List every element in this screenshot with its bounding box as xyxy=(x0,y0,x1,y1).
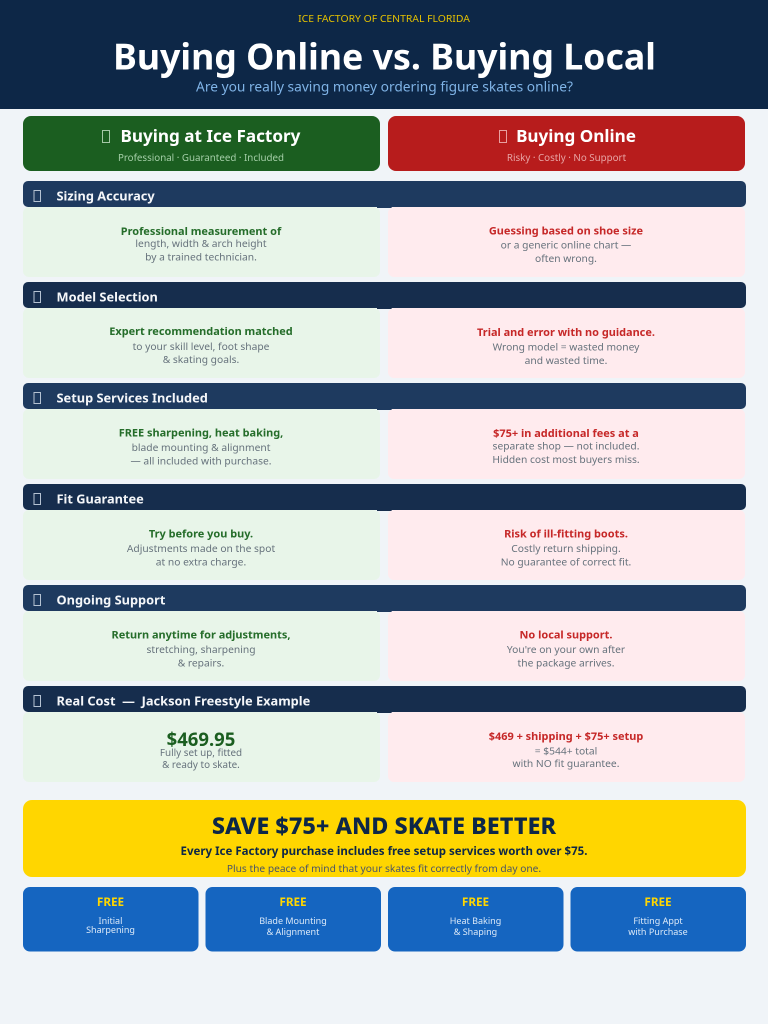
online card: $75+ in additional fees at a xyxy=(493,426,639,441)
online card: = $544+ total xyxy=(535,744,597,758)
panel: free fitting appointment: Fitting Appt xyxy=(633,914,683,927)
online card: with NO fit guarantee. xyxy=(513,757,620,771)
panel: Real Cost row xyxy=(23,686,746,782)
online card: Risk of ill-fitting boots. xyxy=(504,526,628,542)
online card xyxy=(388,712,745,782)
ice factory card: to your skill level, foot shape xyxy=(133,340,270,354)
online card xyxy=(388,308,745,378)
panel: free heat baking: Heat Baking xyxy=(450,914,501,927)
panel: free heat baking: FREE xyxy=(462,894,489,910)
ice factory card xyxy=(23,207,380,277)
ice factory card: Fully set up, fitted xyxy=(160,745,242,759)
online card: No guarantee of correct fit. xyxy=(501,556,632,570)
ice factory card: FREE sharpening, heat baking, xyxy=(119,426,283,440)
panel: Fit Guarantee row xyxy=(23,484,746,580)
ice factory card: blade mounting & alignment xyxy=(132,441,271,455)
title: Buying Online vs. Buying Local xyxy=(113,32,656,80)
ice factory card: $469.95 xyxy=(167,727,235,752)
panel: free fitting appointment: with Purchase xyxy=(628,925,688,938)
brand label: ICE FACTORY OF CENTRAL FLORIDA xyxy=(298,12,470,26)
panel: free blade mounting: & Alignment xyxy=(267,925,320,938)
ice factory card: at no extra charge. xyxy=(156,556,246,570)
ice factory card: Professional measurement of xyxy=(121,224,282,239)
ice factory card: Expert recommendation matched xyxy=(109,324,293,339)
ice factory card: & skating goals. xyxy=(163,353,240,367)
section header: Setup Services Included xyxy=(56,389,208,407)
section header: Model Selection xyxy=(56,288,158,306)
ice factory card: Return anytime for adjustments, xyxy=(112,628,290,642)
tagline: Risky · Costly · No Support xyxy=(507,151,627,164)
ice factory card: & ready to skate. xyxy=(162,757,240,771)
online card: $469 + shipping + $75+ setup xyxy=(489,729,643,744)
ice factory card: length, width & arch height xyxy=(135,237,267,251)
panel: free sharpening: Sharpening xyxy=(86,923,135,936)
online card: separate shop — not included. xyxy=(493,440,640,454)
ice factory card: Try before you buy. xyxy=(149,526,253,542)
panel: free sharpening: FREE xyxy=(97,894,124,910)
online card: Trial and error with no guidance. xyxy=(477,325,655,340)
panel: free heat baking: & Shaping xyxy=(454,925,497,938)
panel: Setup Services Included row xyxy=(23,383,746,479)
panel: free heat baking xyxy=(388,887,564,952)
panel: free blade mounting xyxy=(206,887,381,952)
icon: placeholder box xyxy=(500,130,506,142)
callout text: Every Ice Factory purchase includes free setup services worth over $75. xyxy=(181,844,587,859)
online card: You're on your own after xyxy=(507,643,626,657)
panel: free blade mounting: FREE xyxy=(279,894,307,910)
section header xyxy=(23,585,746,612)
panel: free sharpening xyxy=(23,887,198,952)
panel: free blade mounting: Blade Mounting xyxy=(259,914,327,927)
subtitle: Are you really saving money ordering figure skates online? xyxy=(196,78,573,96)
online card: No local support. xyxy=(520,628,612,642)
tagline: Professional · Guaranteed · Included xyxy=(118,151,284,164)
section header: Fit Guarantee xyxy=(56,490,144,508)
online card: Costly return shipping. xyxy=(511,542,621,556)
online card: or a generic online chart — xyxy=(501,238,631,252)
section header: Real Cost — Jackson Freestyle Example xyxy=(56,692,311,710)
ice factory card: by a trained technician. xyxy=(145,250,257,264)
section header xyxy=(23,383,746,410)
ice factory card: & repairs. xyxy=(178,656,225,670)
panel: Sizing Accuracy row xyxy=(23,181,746,277)
panel: Model Selection row xyxy=(23,282,746,378)
section header: Sizing Accuracy xyxy=(56,187,155,205)
section header xyxy=(23,686,746,713)
heading: Buying Online xyxy=(516,125,636,148)
header banner xyxy=(0,0,768,109)
ice factory card xyxy=(23,510,380,580)
section header: Ongoing Support xyxy=(56,591,166,609)
panel: free sharpening: Initial xyxy=(99,914,122,927)
ice factory card: — all included with purchase. xyxy=(130,454,272,468)
online card: Guessing based on shoe size xyxy=(489,224,644,238)
panel: Buying at Ice Factory column header xyxy=(23,116,380,171)
callout: save banner xyxy=(23,800,746,877)
online card xyxy=(388,409,745,479)
panel: free fitting appointment: FREE xyxy=(644,894,672,910)
ice factory card xyxy=(23,308,380,378)
online card xyxy=(388,510,745,580)
section header xyxy=(23,282,746,309)
section header xyxy=(23,181,746,208)
online card xyxy=(388,611,745,681)
panel: Buying Online column header xyxy=(388,116,745,171)
online card: and wasted time. xyxy=(525,354,608,368)
heading: Buying at Ice Factory xyxy=(121,125,301,148)
online card: Wrong model = wasted money xyxy=(493,340,640,354)
ice factory card xyxy=(23,712,380,782)
section header xyxy=(23,484,746,511)
ice factory card xyxy=(23,409,380,479)
ice factory card xyxy=(23,611,380,681)
online card xyxy=(388,207,745,277)
online card: Hidden cost most buyers miss. xyxy=(492,453,640,467)
callout note: Plus the peace of mind that your skates fit correctly from day one. xyxy=(227,861,541,875)
icon: placeholder box xyxy=(102,130,110,142)
online card: often wrong. xyxy=(535,252,597,266)
online card: the package arrives. xyxy=(518,656,615,670)
panel: free fitting appointment xyxy=(570,887,746,952)
ice factory card: stretching, sharpening xyxy=(146,643,256,657)
panel: Ongoing Support row xyxy=(23,585,746,681)
ice factory card: Adjustments made on the spot xyxy=(127,542,275,556)
callout heading: SAVE $75+ AND SKATE BETTER xyxy=(212,809,557,841)
